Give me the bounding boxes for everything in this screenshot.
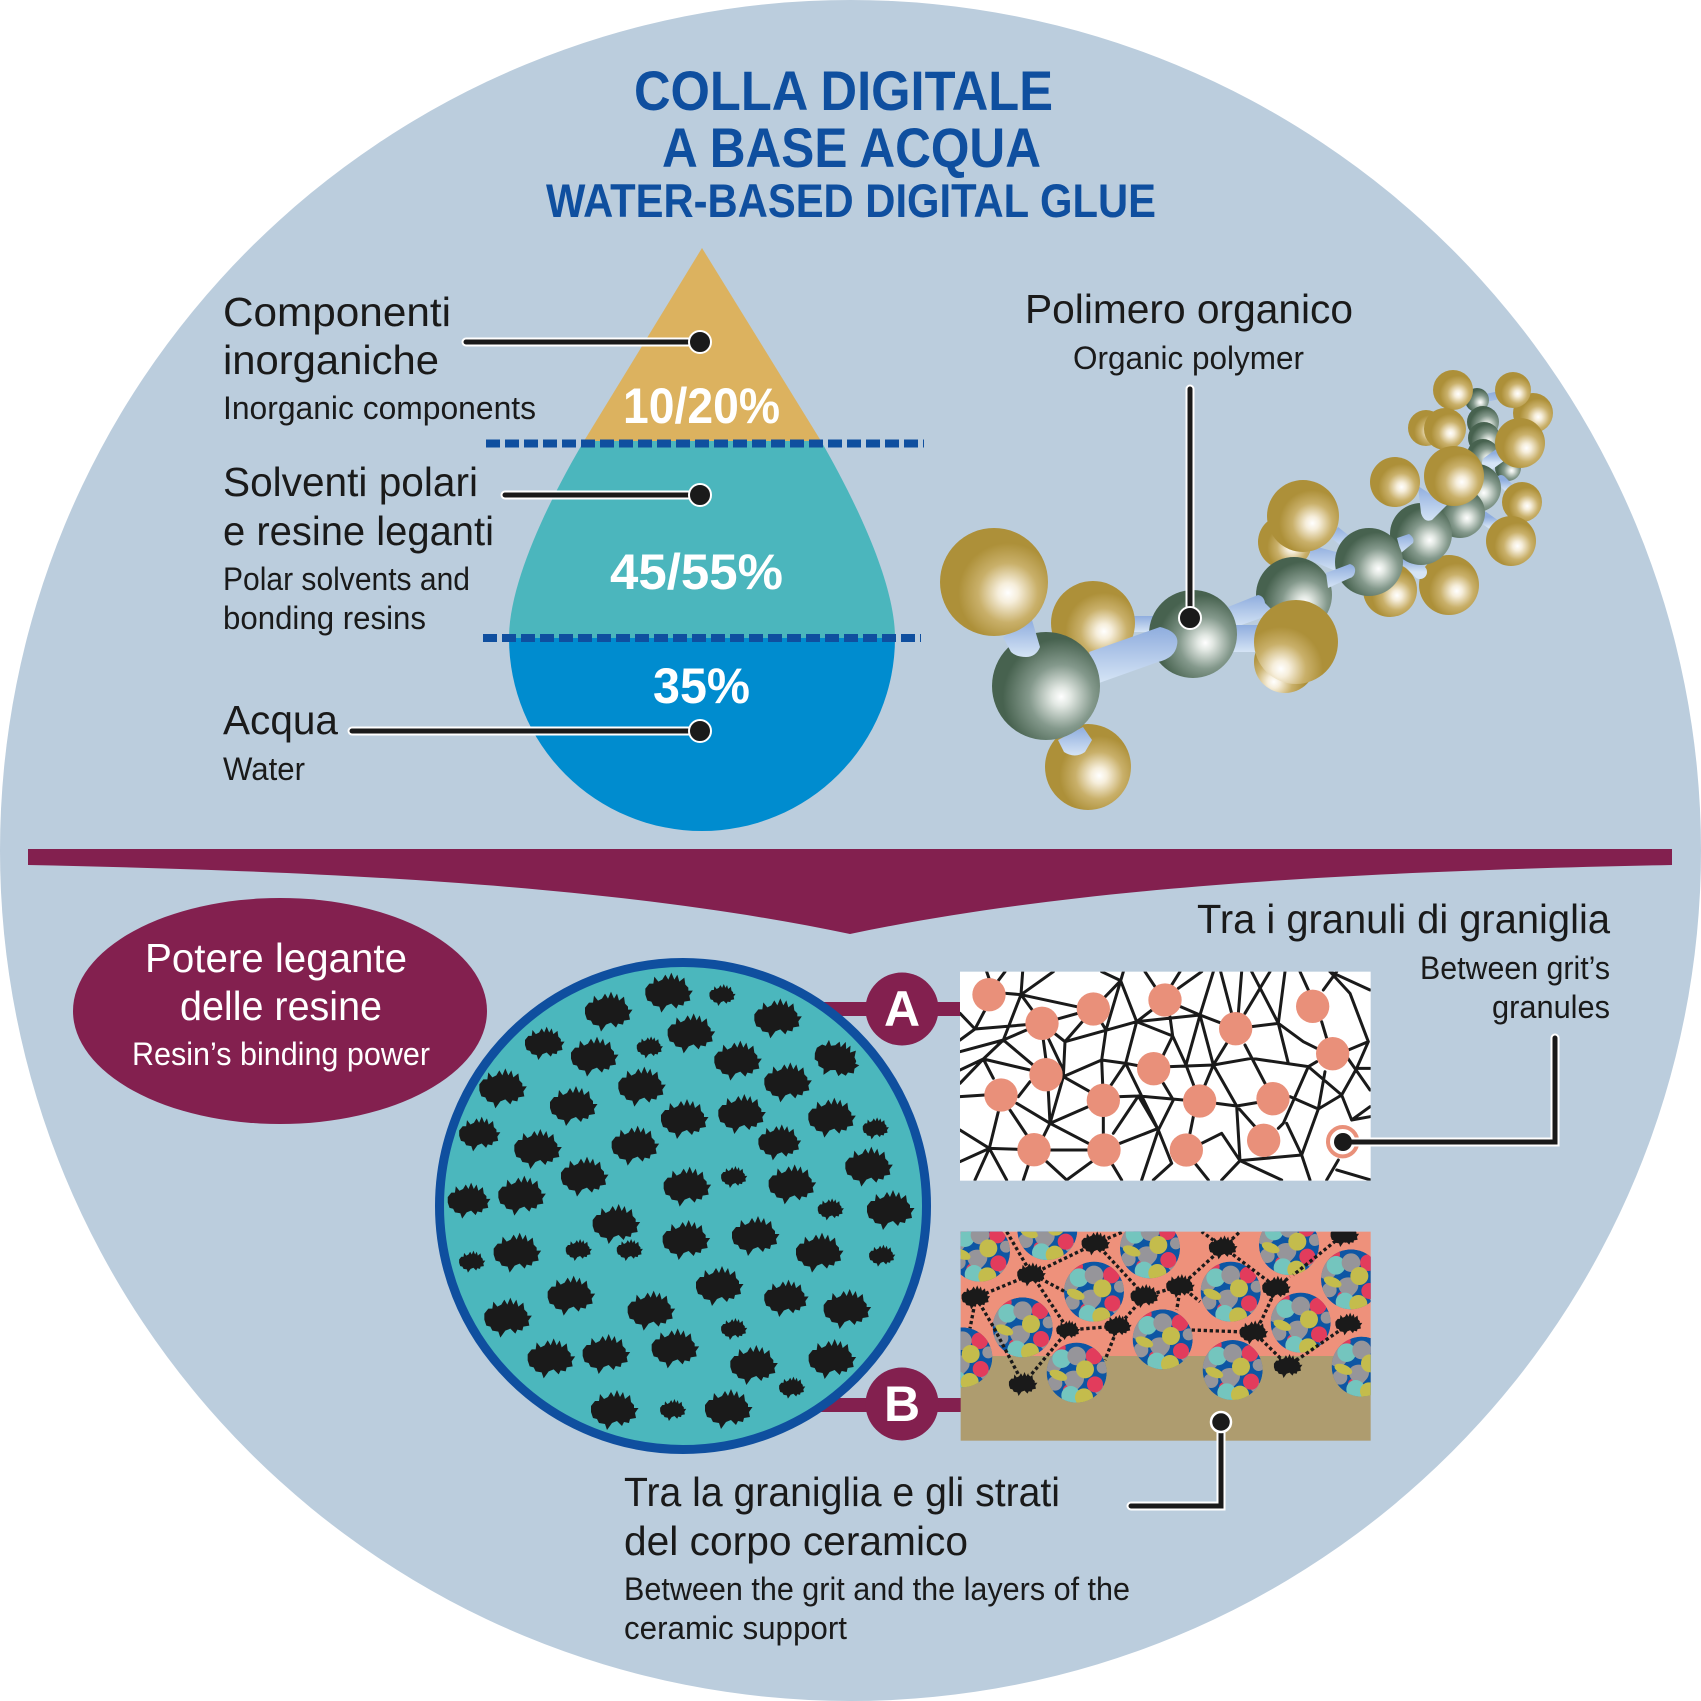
label: between grit and ceramic layers: Between the grit and the layers of the (624, 1571, 1130, 1607)
label: between grit granules (1197, 896, 1610, 1025)
label: polar solvents (223, 459, 494, 636)
label: between grit granules: Tra i granuli di graniglia (1197, 896, 1610, 942)
far cluster (1363, 370, 1553, 617)
label: between grit granules: granules (1492, 989, 1610, 1025)
badge A: A (884, 981, 920, 1037)
connector B (815, 1398, 961, 1412)
percentage 35%: 35% (653, 658, 750, 714)
label: polar solvents: Polar solvents and (223, 561, 470, 597)
oval: resin binding power (73, 898, 487, 1124)
drop segment: polar solvents and resins (509, 441, 895, 638)
label: between grit and ceramic layers: del corpo ceramico (624, 1518, 968, 1564)
badge A (866, 972, 938, 1046)
label: water (223, 697, 338, 787)
maroon divider arrow (28, 849, 1672, 934)
title: WATER-BASED DIGITAL GLUE (546, 174, 1156, 227)
title (546, 59, 1156, 227)
title: COLLA DIGITALE (634, 59, 1053, 122)
badge B: B (884, 1376, 920, 1432)
label: inorganic components: inorganiche (223, 337, 439, 383)
panel A: network between grit granules (960, 972, 1371, 1181)
dashed divider lower (483, 634, 921, 642)
label: water: Water (223, 751, 305, 787)
panel B: grit bonded to ceramic body (960, 1232, 1371, 1441)
label: water: Acqua (223, 697, 338, 743)
drop segment: water (509, 638, 895, 831)
leader: inorganic components (466, 331, 711, 353)
leader: water (352, 720, 711, 742)
drop segment: inorganic components (584, 248, 821, 441)
label: between grit and ceramic layers: Tra la graniglia e gli strati (624, 1469, 1060, 1515)
middle atoms (1225, 480, 1414, 693)
badge B (866, 1368, 938, 1440)
label: polar solvents: Solventi polari (223, 459, 478, 505)
leader: between grit granules (1334, 1038, 1555, 1151)
percentage 45/55%: 45/55% (610, 544, 783, 600)
label: organic polymer: Organic polymer (1073, 340, 1304, 376)
label: inorganic components: Componenti (223, 289, 451, 335)
dashed divider upper (486, 440, 924, 448)
title: A BASE ACQUA (662, 116, 1041, 179)
oval: resin binding power: delle resine (180, 983, 382, 1029)
magnified circle with resin particles (440, 962, 926, 1450)
label: organic polymer (1025, 286, 1353, 376)
oval: resin binding power: Resin’s binding power (132, 1036, 430, 1072)
connector A (815, 1002, 961, 1016)
label: between grit granules: Between grit’s (1420, 950, 1610, 986)
label: inorganic components (223, 289, 536, 426)
label: between grit and ceramic layers (624, 1469, 1130, 1646)
label: inorganic components: Inorganic components (223, 390, 536, 426)
near atoms (940, 528, 1237, 810)
oval: resin binding power: Potere legante (145, 935, 407, 981)
label: between grit and ceramic layers: ceramic support (624, 1610, 847, 1646)
label: organic polymer: Polimero organico (1025, 286, 1353, 332)
molecule illustration (940, 370, 1553, 810)
water drop chart (483, 248, 924, 831)
label: polar solvents: e resine leganti (223, 508, 494, 554)
leader: between grit and ceramic layers (1131, 1412, 1231, 1506)
leader: polar solvents (505, 484, 711, 506)
label: polar solvents: bonding resins (223, 600, 426, 636)
percentage 10/20%: 10/20% (623, 378, 780, 434)
leader: organic polymer (1179, 389, 1201, 629)
